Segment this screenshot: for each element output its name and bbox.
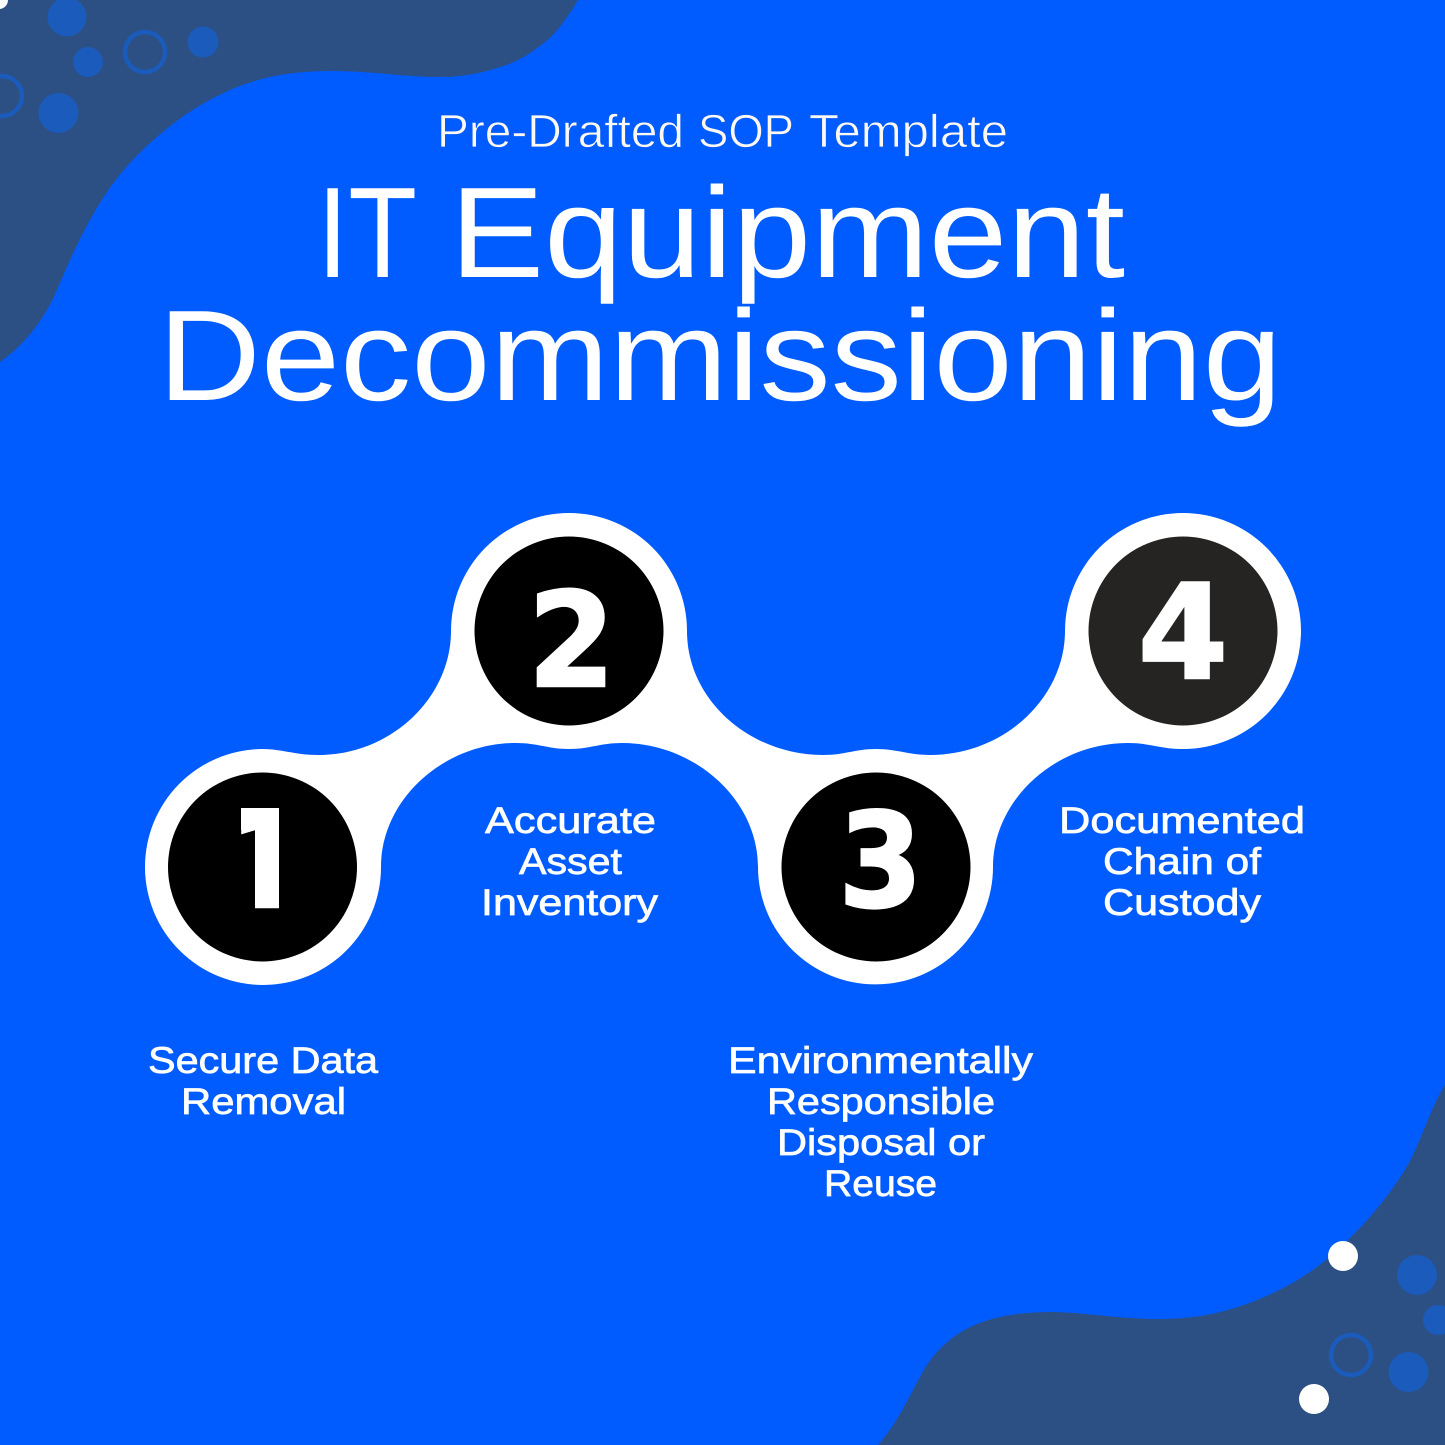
subtitle: Pre-Drafted: [437, 105, 684, 157]
label: step 2: [481, 800, 659, 923]
process chain connector: [145, 513, 1301, 985]
title: Equipment: [450, 161, 1125, 305]
label: step 1: [148, 1040, 378, 1122]
label: step 4: Custody: [1103, 882, 1262, 923]
step 2 badge: [474, 536, 664, 726]
label: step 2: Asset: [519, 841, 623, 882]
title: Decommissioning: [158, 284, 1282, 428]
label: step 3: Environmentally: [728, 1040, 1034, 1081]
step 4 badge: 4: [1138, 556, 1228, 709]
decorative blob: bottom right: [878, 1085, 1445, 1445]
title: IT: [317, 161, 417, 305]
label: step 3: Reuse: [824, 1163, 937, 1204]
step 3 badge: [782, 772, 970, 962]
label: step 1: Removal: [181, 1081, 346, 1122]
step 3 badge: 3: [838, 784, 922, 938]
title: [158, 161, 1282, 428]
label: step 2: Accurate: [485, 800, 656, 841]
step 4 badge: [1088, 536, 1278, 726]
decorative blob: top left: [0, 0, 578, 362]
step 2 badge: 2: [528, 564, 615, 717]
label: step 4: Documented: [1059, 800, 1305, 841]
label: step 3: Disposal or: [777, 1122, 985, 1163]
label: step 3: [728, 1040, 1034, 1204]
subtitle: SOP: [698, 105, 794, 157]
label: step 1: Secure Data: [148, 1040, 378, 1081]
subtitle: [437, 105, 1008, 157]
step 1 badge: 1: [232, 785, 294, 938]
step 1 badge: [168, 772, 357, 962]
label: step 4: [1059, 800, 1305, 923]
subtitle: Template: [809, 105, 1008, 157]
label: step 4: Chain of: [1103, 841, 1262, 882]
label: step 3: Responsible: [767, 1081, 995, 1122]
label: step 2: Inventory: [481, 882, 659, 923]
